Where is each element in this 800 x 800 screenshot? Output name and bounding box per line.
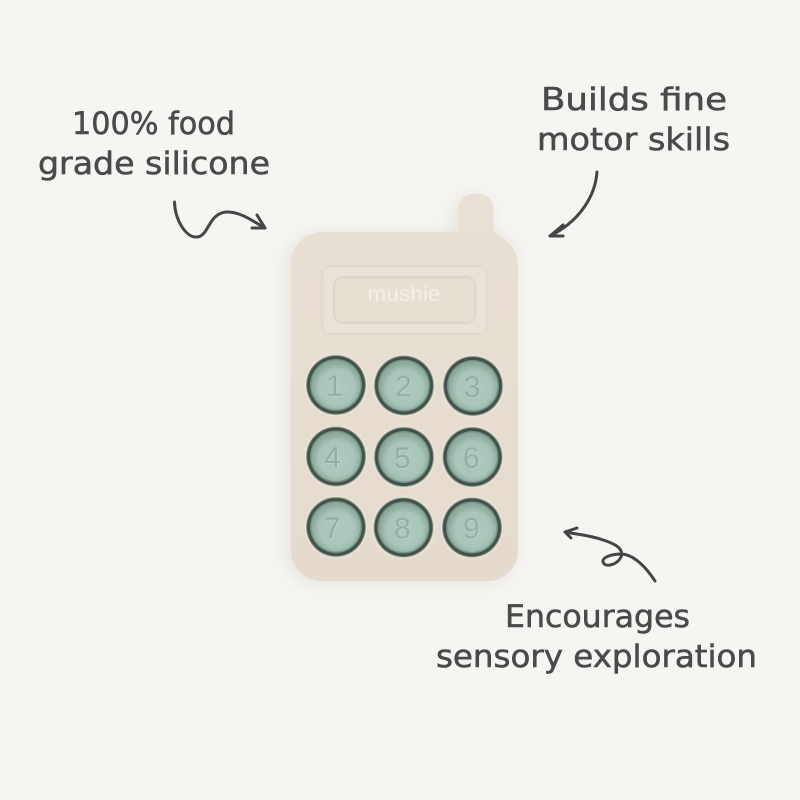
arrow: silicone (174, 202, 265, 237)
button 5: 5 (395, 442, 411, 476)
keypad (305, 354, 504, 558)
callout: food grade silicone (38, 106, 270, 182)
button 3: 3 (464, 371, 481, 404)
button 4 (305, 426, 367, 488)
button 2 (373, 354, 435, 416)
arrow: motor skills (550, 172, 597, 236)
button 8: 8 (394, 512, 411, 546)
screen panel (322, 266, 487, 334)
button 5: 5 (394, 442, 411, 475)
button 1: 1 (326, 370, 343, 403)
button 7 (305, 496, 367, 558)
button 8 (372, 496, 434, 558)
button 2: 2 (395, 370, 412, 404)
callout: sensory exploration: Encourages (505, 599, 690, 635)
button 6: 6 (463, 442, 480, 475)
button 5 (373, 426, 435, 488)
button 3 (442, 355, 504, 417)
callout: food grade silicone: 100% food (72, 106, 235, 142)
callout: sensory exploration: sensory exploration (436, 639, 757, 675)
phone shadow (287, 196, 515, 583)
callout: food grade silicone: grade silicone (38, 146, 270, 182)
button 9: 9 (464, 513, 480, 546)
arrow: sensory (565, 528, 655, 581)
button 6 (442, 426, 504, 488)
callout: fine motor skills: Builds fine (541, 82, 727, 118)
button 2: 2 (396, 371, 412, 404)
phone toy (287, 194, 518, 583)
phone body (291, 194, 518, 581)
callout: fine motor skills (537, 82, 730, 158)
button 1 (305, 354, 367, 416)
button 9: 9 (463, 512, 480, 546)
callout: sensory exploration (436, 599, 757, 675)
button 4: 4 (325, 442, 341, 475)
button 7: 7 (325, 512, 341, 546)
callout: fine motor skills: motor skills (537, 122, 730, 158)
button 1: 1 (327, 370, 343, 404)
button 7: 7 (324, 512, 341, 545)
logo text: mushie (368, 283, 440, 306)
button 6: 6 (464, 442, 480, 476)
button 9 (441, 496, 503, 558)
button 3: 3 (465, 372, 481, 404)
button 4: 4 (324, 442, 341, 474)
button 8: 8 (395, 513, 411, 546)
